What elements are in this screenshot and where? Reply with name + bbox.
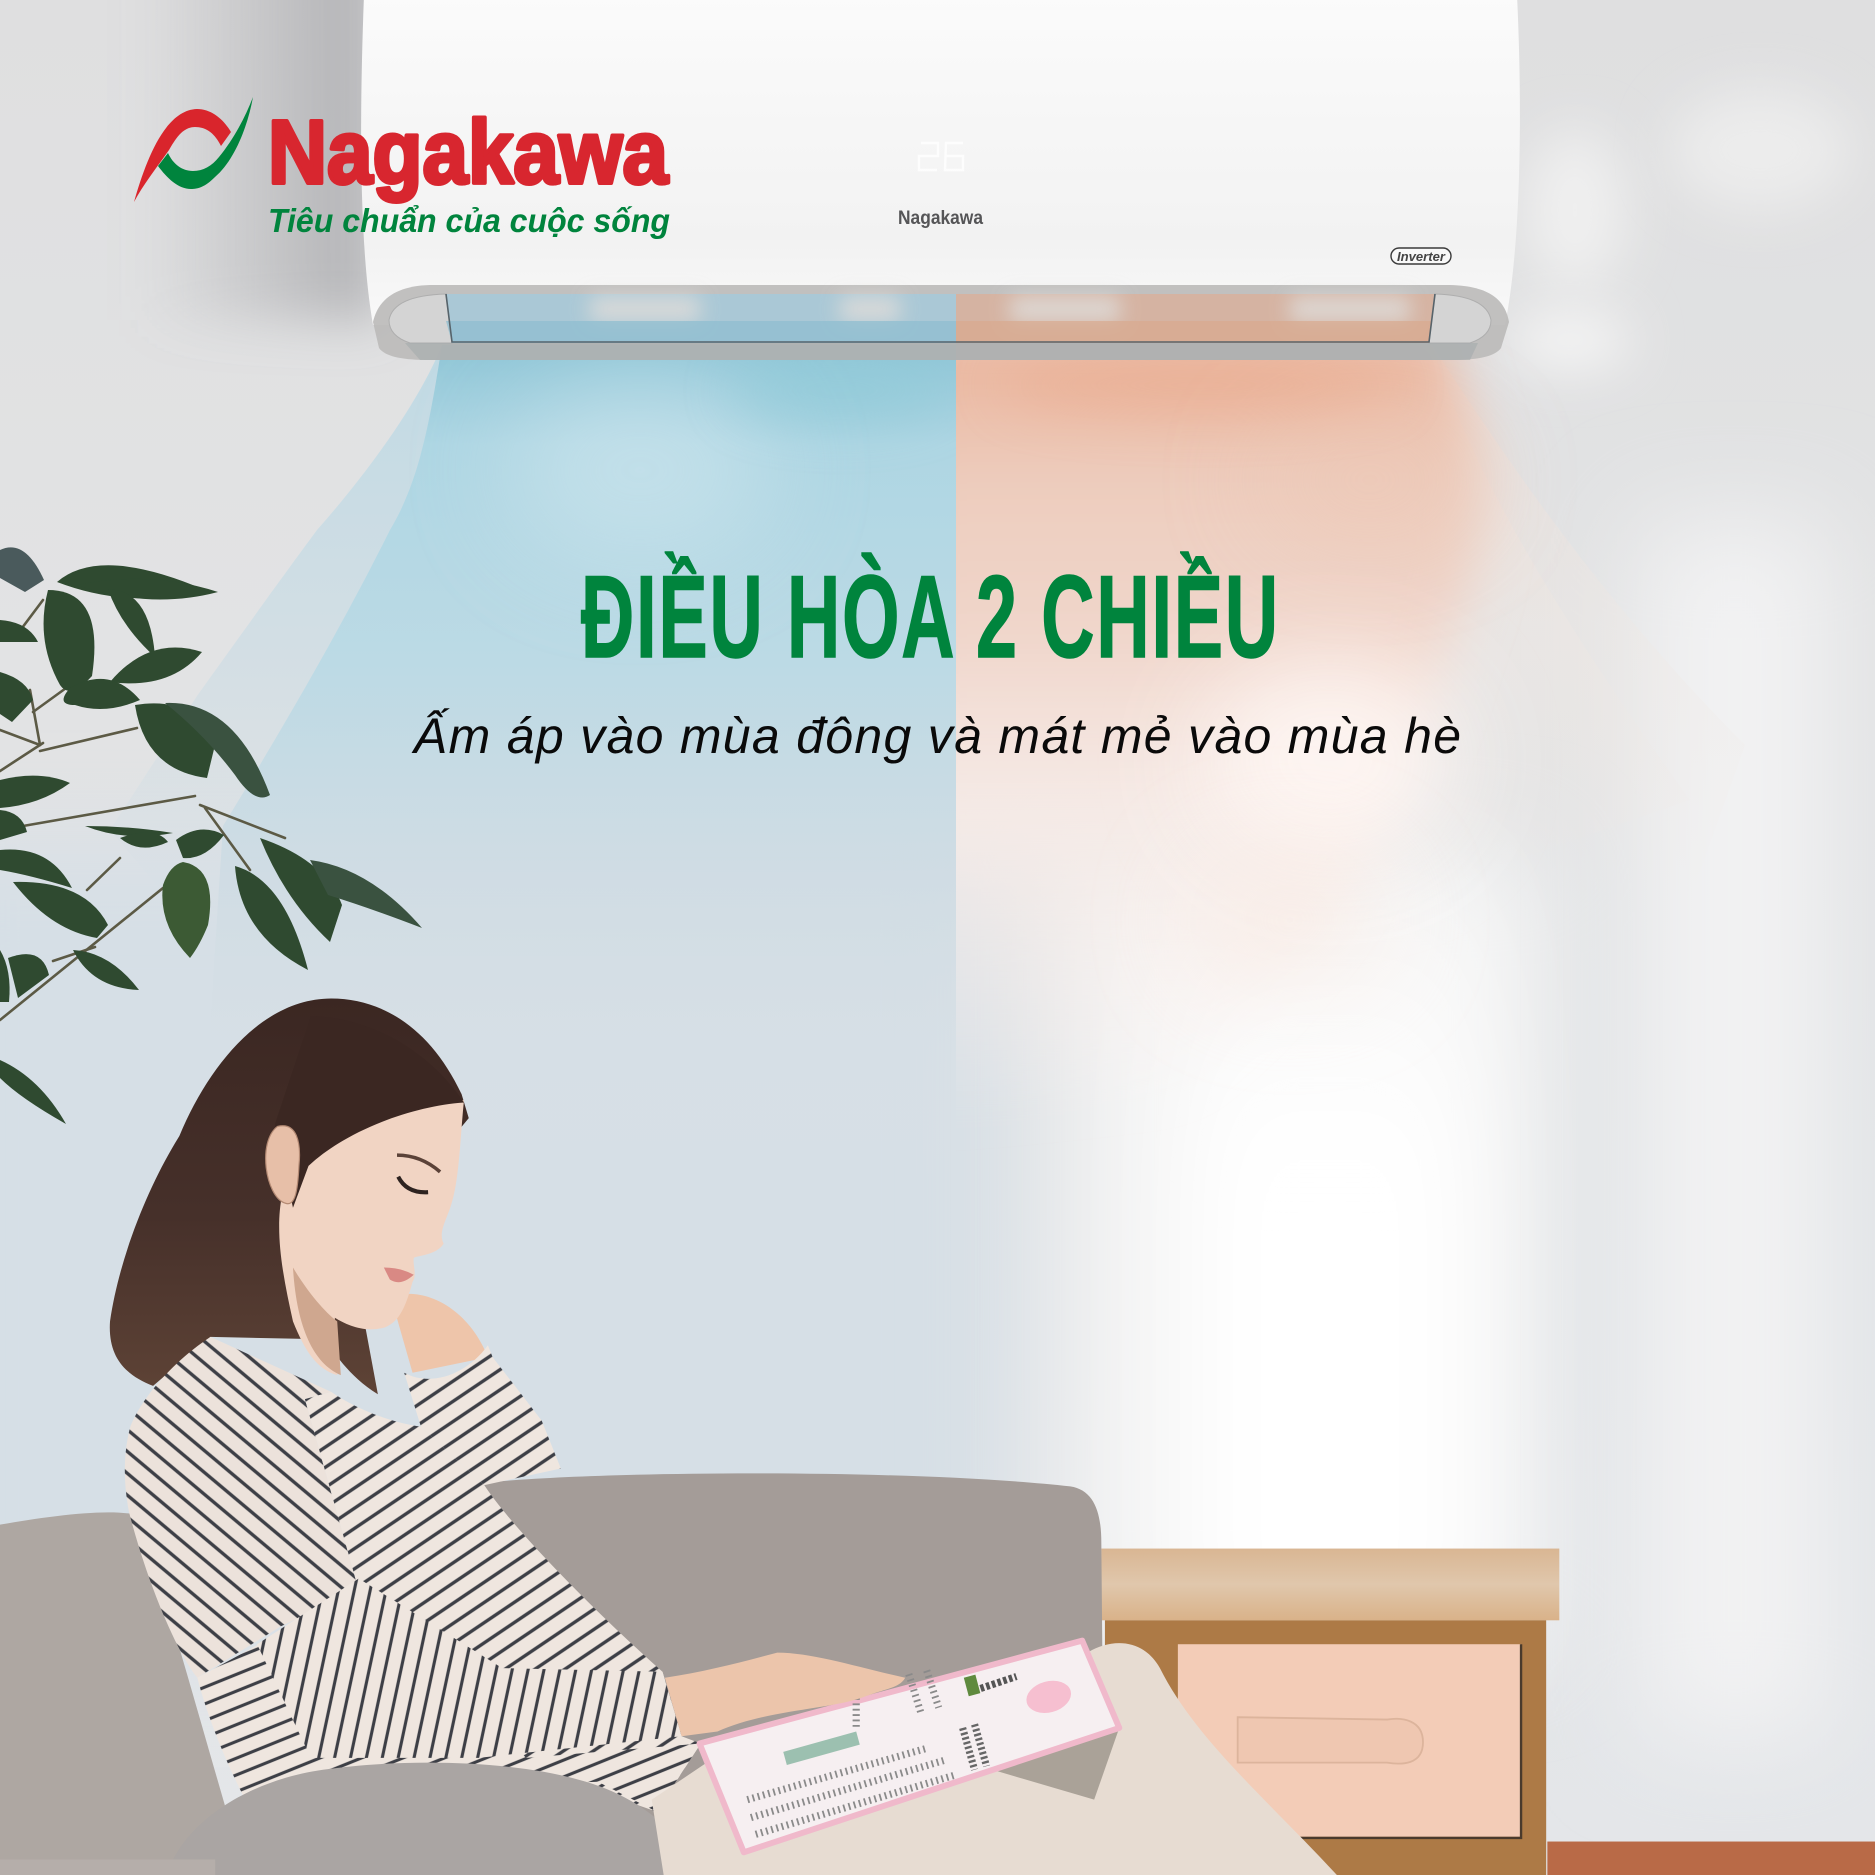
shadow between legs [993, 1728, 1119, 1800]
logo wordmark: Nagakawa [268, 103, 669, 203]
face and neck [279, 1100, 464, 1375]
shirt forearm sleeve [257, 1578, 682, 1758]
raised forearm [391, 1294, 488, 1373]
cold airflow (blue) [157, 360, 956, 902]
magazine pink badge [1023, 1676, 1075, 1718]
floor [1547, 1842, 1875, 1875]
outlet opening, cold side [446, 294, 956, 343]
magazine page [700, 1641, 1119, 1852]
unit body [361, 0, 1520, 325]
magazine text rows [747, 1671, 957, 1834]
hair front [275, 1016, 464, 1208]
logo mark [134, 97, 253, 202]
drawer handle slot [1238, 1717, 1423, 1764]
sofa bottom strip [0, 1859, 215, 1875]
shirt back panel [125, 1337, 359, 1678]
cabinet top plank [1101, 1549, 1559, 1620]
louvre bar [405, 343, 1478, 360]
living room furniture and woman [0, 998, 1875, 1875]
raised sleeve [404, 1345, 561, 1485]
eyebrow [397, 1155, 440, 1172]
magazine caption [981, 1677, 1016, 1688]
neck shadow [293, 1268, 341, 1375]
side cabinet [1101, 1549, 1559, 1875]
plant leaves [0, 547, 422, 1124]
inverter badge: Inverter [1397, 249, 1446, 264]
shirt lower body [197, 1590, 701, 1812]
hair back [110, 998, 469, 1394]
lips [384, 1268, 414, 1282]
sofa seat cushion [167, 1763, 700, 1875]
trousers [652, 1643, 1337, 1875]
woman [110, 998, 701, 1812]
hand [665, 1653, 905, 1736]
cabinet frame [1105, 1620, 1546, 1875]
magazine table [963, 1724, 987, 1770]
shirt torso [305, 1392, 701, 1812]
main title: ĐIỀU HÒA 2 CHIỀU [581, 551, 1280, 682]
cabinet drawer [1178, 1644, 1521, 1837]
warm airflow (salmon) [956, 358, 1552, 1026]
magazine green photo [964, 1675, 980, 1696]
air conditioner wall shadow [140, 0, 380, 320]
unit brand name: Nagakawa [898, 208, 983, 229]
outlet opening, warm side [956, 294, 1434, 343]
left end cap [389, 294, 452, 343]
subtitle: Ấm áp vào mùa đông và mát mẻ vào mùa hè [411, 708, 1461, 764]
drawer dark edge [1244, 1644, 1521, 1838]
plant [0, 547, 422, 1124]
right end cap [1429, 294, 1491, 343]
plant stems [0, 600, 285, 1020]
logo tagline: Tiêu chuẩn của cuộc sống [268, 202, 670, 239]
outlet highlights [590, 296, 1410, 322]
air outlet frame [373, 285, 1509, 360]
outlet dark side lines [446, 294, 1435, 342]
temperature display [919, 143, 963, 170]
ear [266, 1126, 300, 1204]
sofa back cushion [359, 1473, 1124, 1875]
logo [134, 97, 670, 239]
lower louvre band [446, 321, 956, 343]
magazine [700, 1641, 1119, 1852]
lower louvre band warm [956, 321, 1432, 343]
sofa left arm [0, 1512, 245, 1875]
eye [398, 1177, 428, 1192]
magazine photo strip [783, 1732, 860, 1765]
air conditioner unit [361, 0, 1520, 360]
